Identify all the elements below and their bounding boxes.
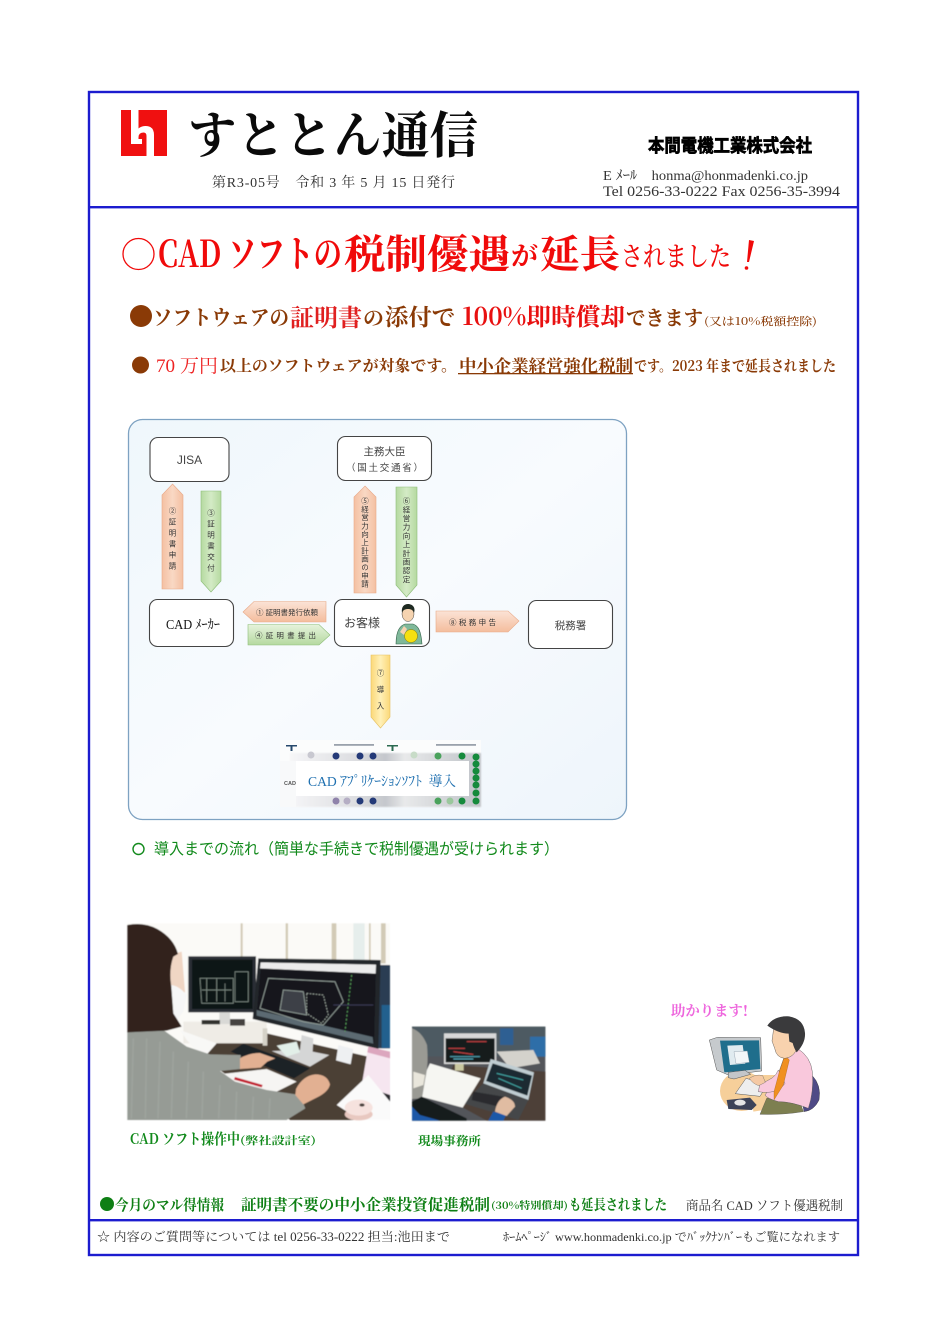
laptop bbox=[483, 1059, 534, 1100]
point 2: eligibility: 以上のソフトウェアが対象です。 bbox=[220, 354, 457, 376]
point 2: eligibility bbox=[132, 352, 836, 377]
arrow: step 8 bbox=[436, 611, 519, 632]
software packages: CAD ｱﾌﾟﾘｹｰｼｮﾝｿﾌﾄ 導入 bbox=[308, 774, 456, 790]
caption: site office: 現場事務所 bbox=[418, 1132, 481, 1149]
panel: flow diagram bbox=[128, 420, 626, 820]
point 1: software certificate: 100%即時償却 bbox=[462, 297, 625, 332]
illustration: man at computer bbox=[709, 1016, 820, 1114]
person bbox=[412, 1028, 428, 1099]
headline bbox=[123, 223, 754, 280]
caption: office: CAD ソフト操作中 bbox=[130, 1128, 240, 1149]
monitor bbox=[444, 1033, 496, 1064]
box: JISA bbox=[150, 438, 229, 482]
box: tax office: 税務署 bbox=[555, 619, 586, 632]
arrow: step 2: ②証明書申請 bbox=[168, 507, 177, 573]
newsletter title: すととん通信 bbox=[188, 96, 478, 168]
arrow: step 7 bbox=[371, 655, 390, 728]
keyboard bbox=[735, 1078, 767, 1096]
left monitor bbox=[188, 956, 256, 1012]
caption: office: (弊社設計室) bbox=[240, 1133, 316, 1148]
mousepad bbox=[727, 1098, 757, 1110]
box: minister: 主務大臣 bbox=[364, 445, 406, 458]
monthly deal strip bbox=[100, 1193, 667, 1215]
keyboard bbox=[231, 1044, 310, 1078]
page frame bbox=[89, 92, 858, 1255]
legs bbox=[760, 1097, 803, 1114]
caption: office bbox=[130, 1128, 316, 1149]
arrow: step 1 bbox=[243, 602, 326, 622]
box: CAD maker bbox=[150, 600, 234, 646]
arrow: step 3 bbox=[201, 491, 221, 592]
arrow: step 4: ④ 証 明 書 提 出 bbox=[255, 630, 316, 640]
header divider bbox=[89, 206, 859, 208]
shirt bbox=[765, 1048, 813, 1108]
point 1: software certificate: (又は10%税額控除) bbox=[704, 313, 817, 329]
photo: office CAD work bbox=[127, 923, 390, 1120]
papers bbox=[213, 1069, 297, 1103]
email: E ﾒｰﾙ honma@honmadenki.co.jp bbox=[603, 169, 808, 184]
issue line: 第R3-05号 令和 3 年 5 月 15 日発行 bbox=[212, 174, 455, 191]
box: customer: お客様 bbox=[344, 616, 380, 630]
arrow: step 1: ① 証明書発行依頼 bbox=[256, 607, 318, 617]
point 1: software certificate: 証明書 bbox=[290, 298, 362, 333]
arrow: step 7: ⑦導入 bbox=[376, 669, 385, 718]
hands bbox=[240, 1053, 275, 1069]
point 1: software certificate: できます bbox=[626, 302, 703, 331]
desk bbox=[183, 1030, 390, 1120]
header bbox=[121, 96, 841, 200]
point 1: software certificate: ソフトウェアの bbox=[153, 302, 289, 332]
point 1: software certificate bbox=[130, 297, 817, 333]
tape roll bbox=[345, 1108, 373, 1120]
arrow: step 6 bbox=[396, 487, 417, 597]
point 2: eligibility: 70 万円 bbox=[156, 356, 218, 377]
tie bbox=[774, 1055, 789, 1100]
footer divider bbox=[89, 1219, 859, 1221]
monthly deal strip: も延長されました bbox=[569, 1194, 667, 1215]
monthly deal strip: (30%特別償却) bbox=[491, 1197, 568, 1212]
monthly deal strip: 今月のマル得情報 bbox=[115, 1194, 224, 1215]
point 1: software certificate: の bbox=[363, 302, 384, 331]
arrow: step 8: ⑧ 税 務 申 告 bbox=[449, 617, 496, 627]
chair bbox=[802, 1075, 820, 1112]
sweater bbox=[127, 1030, 305, 1120]
arrow: step 4 bbox=[248, 624, 330, 645]
arrow: step 2 bbox=[162, 484, 183, 589]
monitor bbox=[709, 1037, 762, 1075]
diagram caption: 導入までの流れ（簡単な手続きで税制優遇が受けられます） bbox=[154, 840, 559, 858]
headline: 延長 bbox=[540, 224, 620, 280]
box: JISA: JISA bbox=[177, 453, 202, 467]
box: minister: （国土交通省） bbox=[346, 462, 423, 474]
logo bbox=[121, 110, 167, 156]
monthly deal strip: 証明書不要の中小企業投資促進税制 bbox=[241, 1193, 490, 1215]
box: tax office bbox=[528, 600, 612, 648]
paper bbox=[415, 1063, 481, 1108]
box: minister bbox=[338, 436, 432, 480]
desk card bbox=[336, 1045, 353, 1064]
arrow: step 5 bbox=[354, 486, 376, 593]
website note: ﾎｰﾑﾍﾟｰｼﾞ www.honmadenki.co.jp でﾊﾞｯｸﾅﾝﾊﾞｰもご覧になれます bbox=[503, 1230, 840, 1244]
speech text: 助かります! bbox=[671, 1000, 748, 1021]
arrow: step 5: ⑤経営力向上計画の申請 bbox=[360, 497, 370, 589]
software packages bbox=[280, 740, 481, 807]
photo: site office bbox=[412, 1027, 545, 1121]
box: CAD maker: CAD ﾒｰｶｰ bbox=[166, 617, 220, 632]
icon: worker with helmet bbox=[396, 604, 422, 644]
company name: 本間電機工業株式会社 bbox=[648, 136, 812, 156]
point 2: eligibility: 中小企業経営強化税制 bbox=[459, 352, 633, 377]
hands bbox=[749, 1075, 765, 1086]
software packages: CAD bbox=[284, 781, 296, 787]
arrow: step 6: ⑥経営力向上計画認定 bbox=[402, 497, 411, 584]
point 1: software certificate: 添付で bbox=[385, 299, 455, 332]
headline: が bbox=[511, 236, 538, 273]
face bbox=[167, 952, 185, 1025]
contact note: ☆ 内容のご質問等については tel 0256-33-0222 担当:池田まで bbox=[97, 1229, 450, 1244]
point 2: eligibility: です。2023 年まで延長されました bbox=[634, 355, 836, 376]
headline: されました bbox=[621, 235, 731, 274]
headline: CAD ソフトの bbox=[158, 224, 342, 278]
hair bbox=[127, 924, 182, 1032]
box: customer bbox=[334, 600, 430, 646]
calendar bbox=[361, 1047, 390, 1102]
product name: 商品名 CAD ソフト優遇税制 bbox=[686, 1198, 843, 1213]
monitor stand bbox=[272, 1035, 329, 1067]
right side dark bbox=[377, 965, 390, 1048]
telephone and fax: Tel 0256-33-0222 Fax 0256-35-3994 bbox=[603, 184, 841, 200]
head bbox=[772, 1023, 801, 1058]
headline: 税制優遇 bbox=[344, 223, 510, 280]
arrow: step 3: ③証明書交付 bbox=[206, 509, 216, 575]
right monitor bbox=[253, 958, 381, 1049]
